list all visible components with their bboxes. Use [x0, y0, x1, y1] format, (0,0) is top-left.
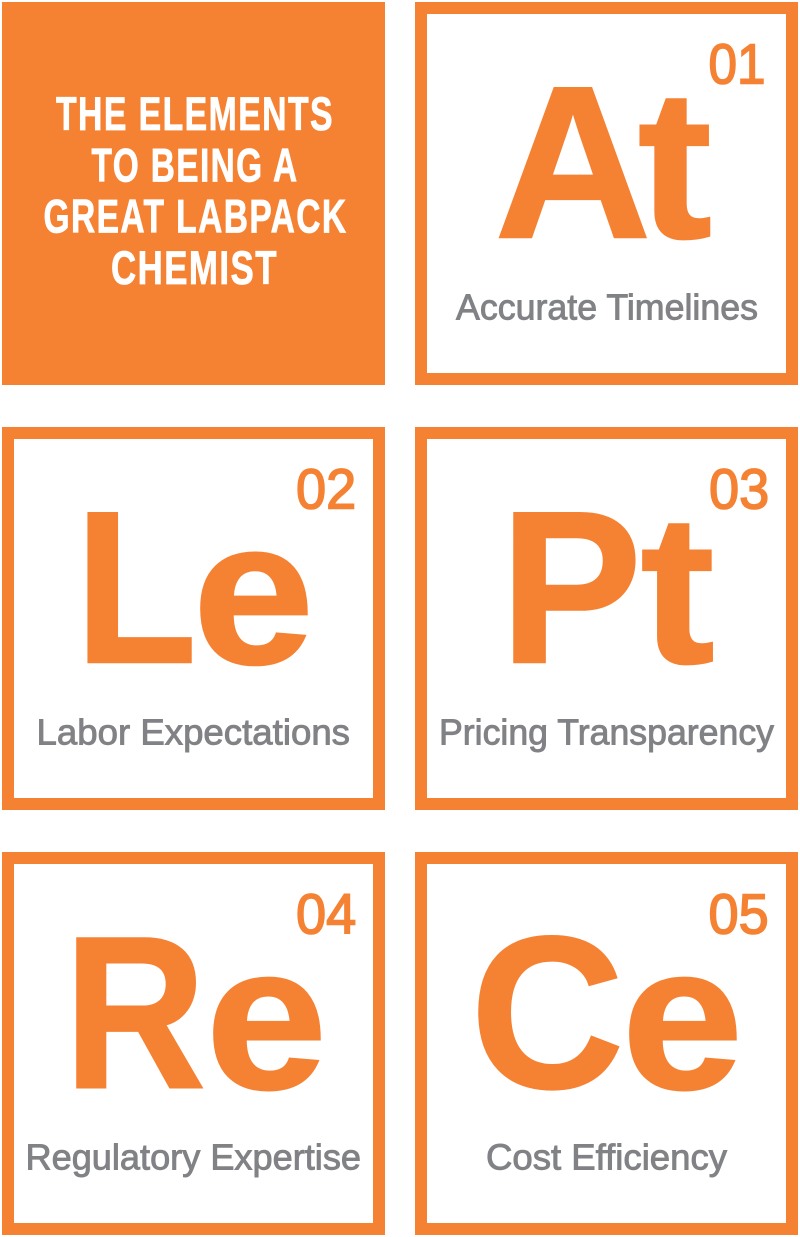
element symbol Ce: C: [470, 892, 624, 1134]
element label: Labor Expectations: [36, 711, 350, 752]
element number 03: 03: [709, 457, 769, 521]
element symbol Re: e: [206, 902, 327, 1132]
element symbol Le: e: [193, 477, 314, 707]
title: [44, 88, 348, 295]
element label: Regulatory Expertise: [26, 1136, 361, 1177]
element symbol Le: L: [75, 467, 197, 709]
panel: Cost Efficiency: [421, 858, 792, 1229]
element number 04: 04: [296, 882, 356, 946]
element number 01: 01: [708, 33, 766, 96]
element number 05: 05: [708, 882, 769, 946]
title: THE ELEMENTS: [56, 88, 334, 141]
element symbol At: A: [495, 41, 651, 283]
element symbol Ce: e: [622, 902, 743, 1132]
element symbol Pt: [500, 466, 715, 709]
element label: Pricing Transparency: [439, 711, 774, 752]
element symbol Pt: t: [640, 471, 715, 708]
element symbol At: t: [638, 46, 712, 283]
panel: Regulatory Expertise: [8, 858, 379, 1229]
title: GREAT LABPACK: [44, 191, 348, 244]
panel: Accurate Timelines: [421, 8, 792, 379]
element symbol Pt: P: [500, 466, 642, 709]
element symbol Le: [75, 467, 314, 709]
element label: Cost Efficiency: [486, 1136, 727, 1177]
element number 02: 02: [296, 457, 356, 521]
panel: Labor Expectations: [8, 433, 379, 804]
element symbol Re: R: [64, 891, 206, 1134]
element symbol Re: [64, 891, 327, 1134]
title: CHEMIST: [111, 242, 278, 295]
panel: title block: [2, 2, 385, 385]
panel: Pricing Transparency: [421, 433, 792, 804]
title: TO BEING A: [92, 139, 298, 192]
element symbol Ce: [470, 892, 743, 1134]
element label: Accurate Timelines: [456, 286, 758, 327]
